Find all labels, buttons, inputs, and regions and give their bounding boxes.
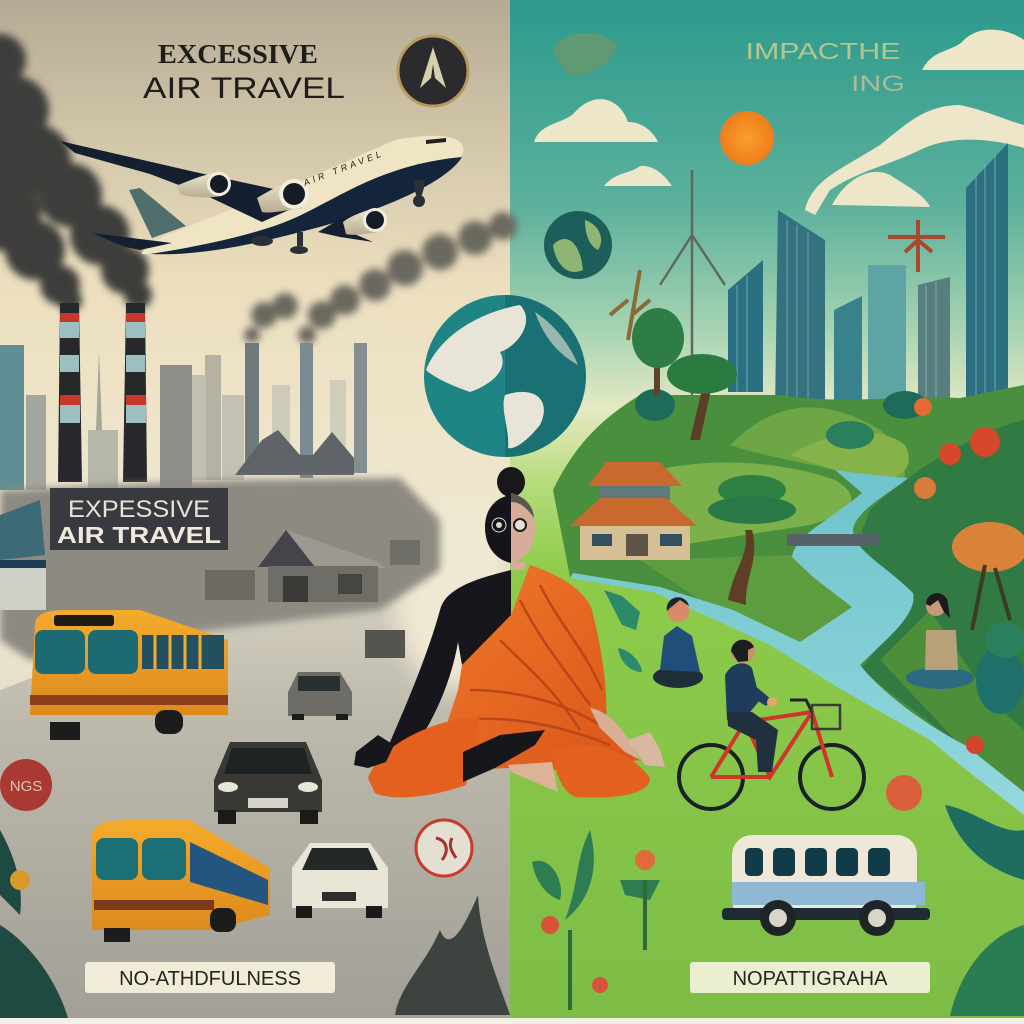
car: silver far xyxy=(288,672,352,720)
title: excessive air travel: EXCESSIVE xyxy=(158,39,318,69)
billboard: excessive air travel: EXPESSIVE xyxy=(68,496,210,523)
small floating cross figure xyxy=(888,220,945,272)
grey town xyxy=(0,478,440,660)
icon: small green globe xyxy=(544,211,612,279)
icon: red stamp left xyxy=(0,759,52,811)
panel: polluted left background xyxy=(0,0,515,1024)
plane: landing gear xyxy=(251,180,425,254)
left foliage xyxy=(0,830,510,1018)
label: nopattigraha xyxy=(690,962,930,993)
figure: inner skin xyxy=(508,762,558,792)
tile roof house xyxy=(570,462,697,560)
river and stream xyxy=(570,470,1024,815)
left city skyline xyxy=(0,345,346,490)
yellow bus upper xyxy=(30,610,228,740)
airplane xyxy=(60,136,463,254)
icon: round emblem xyxy=(398,36,468,106)
large earth globe xyxy=(424,295,586,457)
bridge xyxy=(787,534,880,546)
figure: orange robe torso xyxy=(440,565,640,770)
title: excessive air travel xyxy=(143,39,345,105)
white and blue minibus xyxy=(722,835,930,936)
green hills xyxy=(553,385,1024,805)
meditating person in the forest xyxy=(653,597,703,688)
car: white xyxy=(292,843,388,918)
green city towers xyxy=(728,143,1008,412)
figure: right arm xyxy=(590,708,640,760)
label: nopattigraha: NOPATTIGRAHA xyxy=(733,968,888,990)
icon: red stamp left: NGS xyxy=(10,778,42,795)
billboard: excessive air travel: AIR TRAVEL xyxy=(57,522,221,548)
icon: sun xyxy=(720,111,774,165)
plane: engines xyxy=(176,172,387,235)
trees xyxy=(610,270,796,605)
plane: tail stabilizer xyxy=(92,233,172,250)
title: right side: IMPACTHE xyxy=(746,38,900,64)
panel: teal sky clouds xyxy=(534,30,1024,215)
figure: black forearm xyxy=(463,730,545,782)
figure: left leg xyxy=(368,716,480,797)
factory chimneys xyxy=(58,303,367,482)
right forest flora xyxy=(914,398,1024,754)
car: dark xyxy=(214,742,322,824)
seated woman by the river xyxy=(906,593,974,689)
billboard: excessive air travel xyxy=(50,488,228,550)
plane: fuselage xyxy=(142,136,463,254)
plane: tail fin xyxy=(129,188,186,238)
yellow bus lower xyxy=(92,820,270,942)
plane: far wing xyxy=(318,213,373,242)
figure: right leg xyxy=(552,745,650,798)
figure: head xyxy=(485,467,535,570)
cyclist xyxy=(679,639,864,809)
central meditating figure xyxy=(354,467,665,798)
figure: robe folds xyxy=(460,585,610,745)
floating leaves near figure xyxy=(604,590,642,672)
wind turbine mast xyxy=(660,170,725,410)
label: no-mindfulness xyxy=(85,962,335,993)
panel: green right background xyxy=(510,0,1024,1024)
figure: dark arm and torso xyxy=(378,560,511,770)
figure: hands xyxy=(354,735,394,768)
icon: floating leaf top xyxy=(552,33,618,75)
plane: upper wing xyxy=(60,141,300,222)
title: excessive air travel: AIR TRAVEL xyxy=(143,72,345,105)
plane: dark belly xyxy=(150,157,462,254)
grey wooden house xyxy=(258,530,385,602)
icon: red circle sign xyxy=(416,820,472,876)
title: right side xyxy=(746,38,905,96)
plane: livery lettering: AIR TRAVEL xyxy=(301,149,382,188)
label: no-mindfulness: NO-ATHDFULNESS xyxy=(119,968,301,990)
plane: cockpit window xyxy=(426,138,446,144)
right foliage xyxy=(532,775,1024,1016)
left smoke plumes xyxy=(0,34,517,344)
title: right side: ING xyxy=(851,71,905,96)
